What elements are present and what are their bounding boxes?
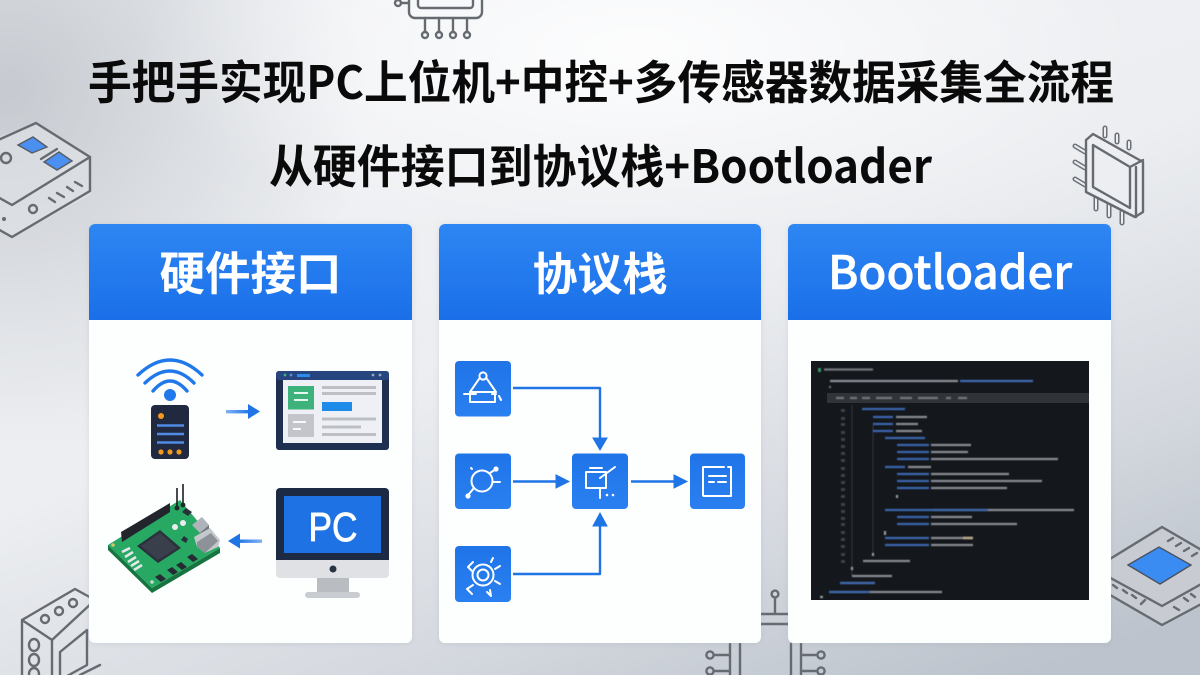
icon: application window xyxy=(276,371,389,450)
panel header: bootloader: Bootloader xyxy=(828,237,1072,303)
icon: bottom left device decoration xyxy=(22,589,100,675)
arrow: sensor to window xyxy=(226,404,260,419)
panel: bootloader xyxy=(788,224,1111,643)
icon: PC monitor xyxy=(276,488,389,598)
node: top input xyxy=(455,361,511,416)
flow arrows xyxy=(513,388,687,574)
icon: left isometric device decoration xyxy=(0,123,91,237)
panel header: hardware interfaces: 硬件接口 xyxy=(160,238,342,304)
code screenshot xyxy=(811,361,1089,600)
panel: protocol stack xyxy=(439,224,761,643)
title: 手把手实现PC上位机+中控+多传感器数据采集全流程 xyxy=(88,47,1114,113)
arrow: PC to board xyxy=(228,534,262,548)
PC label: PC xyxy=(308,504,358,550)
icon: bottom right chip decoration xyxy=(1105,527,1200,625)
panel header: protocol stack xyxy=(439,224,761,320)
panel header: hardware interfaces xyxy=(89,224,412,320)
panel: hardware interfaces xyxy=(89,224,412,643)
icon: bottom circuit decoration xyxy=(706,591,825,675)
icon: wifi sensor device xyxy=(138,360,202,459)
node: middle input xyxy=(455,454,511,509)
icon: top chip decoration xyxy=(395,0,482,38)
node: central controller xyxy=(572,454,628,509)
node: output xyxy=(690,454,745,509)
subtitle: 从硬件接口到协议栈+Bootloader xyxy=(269,131,933,197)
panel header: bootloader xyxy=(788,224,1111,320)
icon: green circuit board xyxy=(108,484,220,593)
icon: right chip decoration xyxy=(1075,128,1143,223)
node: bottom input xyxy=(455,546,511,602)
panel header: protocol stack: 协议栈 xyxy=(532,238,668,303)
